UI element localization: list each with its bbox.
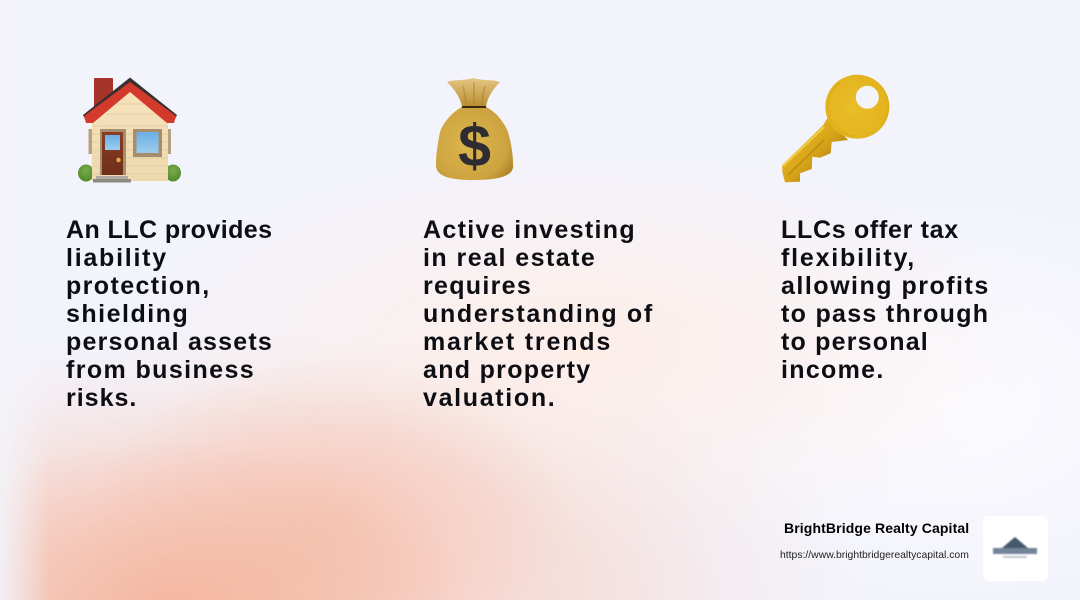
text block 1: shielding bbox=[66, 300, 189, 328]
text block 2: in real estate bbox=[423, 244, 596, 272]
logo card bbox=[983, 516, 1048, 581]
text block 3: LLCs offer tax bbox=[781, 216, 959, 244]
text block 1: risks. bbox=[66, 384, 137, 412]
text block 2: understanding of bbox=[423, 300, 654, 328]
icon: key bbox=[782, 74, 890, 182]
icon: house bbox=[78, 78, 181, 182]
icon: money bag bbox=[436, 78, 514, 180]
text block 1: protection, bbox=[66, 272, 211, 300]
text block 3 bbox=[781, 216, 990, 384]
icon: money bag: $ bbox=[458, 113, 491, 179]
text block 1 bbox=[66, 216, 273, 412]
text block 2: valuation. bbox=[423, 384, 556, 412]
text block 2: requires bbox=[423, 272, 532, 300]
company url: https://www.brightbridgerealtycapital.com bbox=[780, 550, 969, 561]
text block 2: and property bbox=[423, 356, 591, 384]
text block 3: to personal bbox=[781, 328, 929, 356]
text block 2: market trends bbox=[423, 328, 612, 356]
text block 1: An LLC provides bbox=[66, 216, 272, 244]
text block 3: allowing profits bbox=[781, 272, 990, 300]
text block 2: Active investing bbox=[423, 216, 636, 244]
text block 2 bbox=[423, 216, 654, 412]
text block 3: income. bbox=[781, 356, 885, 384]
text block 1: liability bbox=[66, 244, 168, 272]
company name: BrightBridge Realty Capital bbox=[784, 520, 969, 536]
text block 1: from business bbox=[66, 356, 255, 384]
text block 1: personal assets bbox=[66, 328, 273, 356]
text block 3: to pass through bbox=[781, 300, 989, 328]
text block 3: flexibility, bbox=[781, 244, 916, 272]
